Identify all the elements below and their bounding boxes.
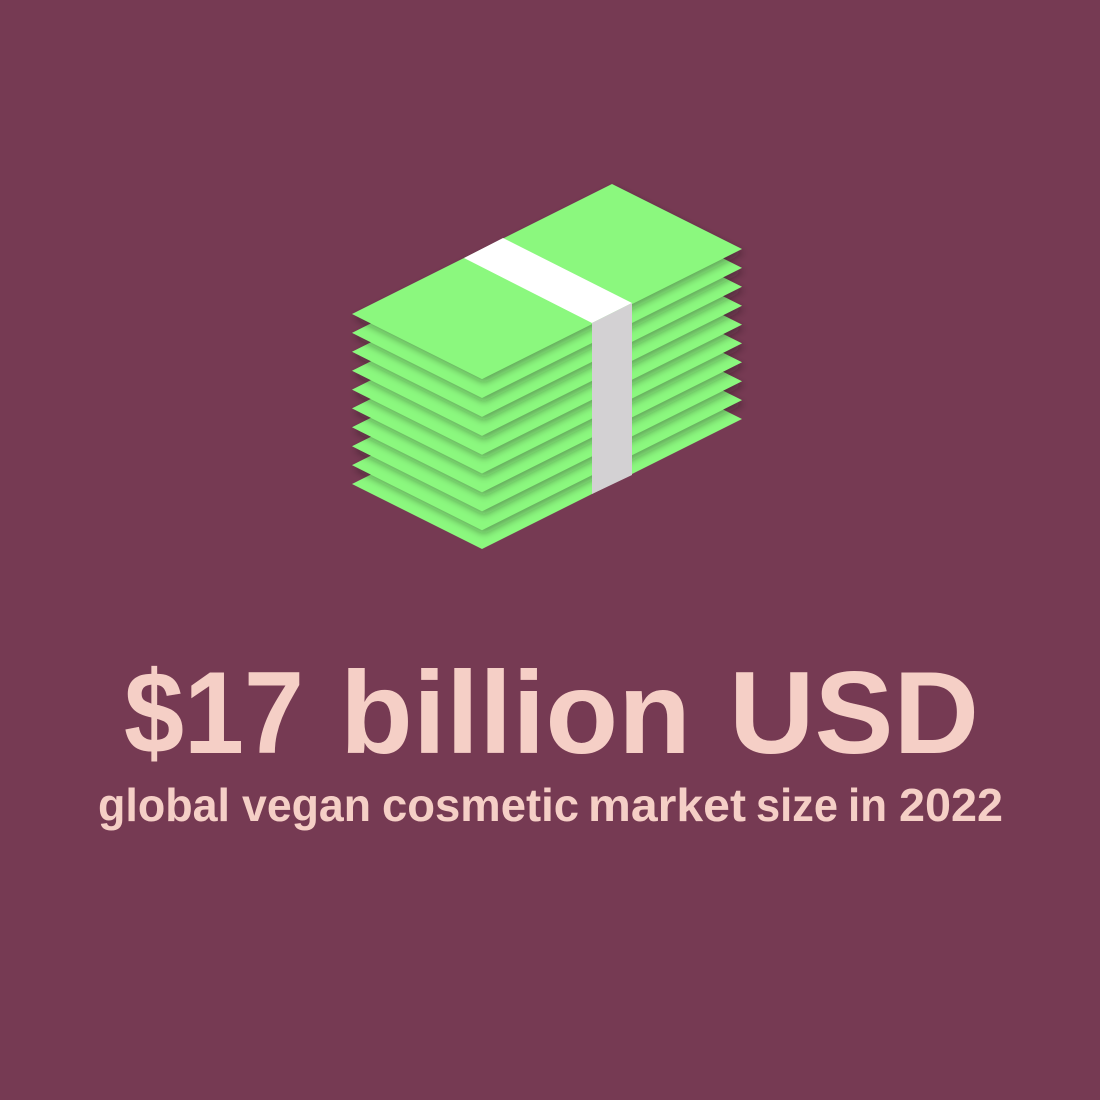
- subtitle: 2022: [899, 779, 1003, 831]
- subtitle: [98, 779, 1003, 831]
- icon: stack of green banknotes: [352, 184, 742, 549]
- subtitle: global: [98, 779, 230, 831]
- headline figure: USD: [729, 647, 979, 778]
- stacked banknote sheets: [352, 184, 742, 549]
- paper band: front: [592, 303, 632, 494]
- paper band: top: [464, 238, 632, 323]
- headline figure: $17: [124, 647, 304, 778]
- subtitle: vegan: [242, 779, 371, 831]
- headline figure: [124, 647, 979, 778]
- headline figure: billion: [340, 647, 691, 778]
- subtitle: in: [848, 779, 887, 831]
- subtitle: market: [588, 779, 746, 831]
- subtitle: size: [756, 779, 838, 831]
- subtitle: cosmetic: [382, 779, 579, 831]
